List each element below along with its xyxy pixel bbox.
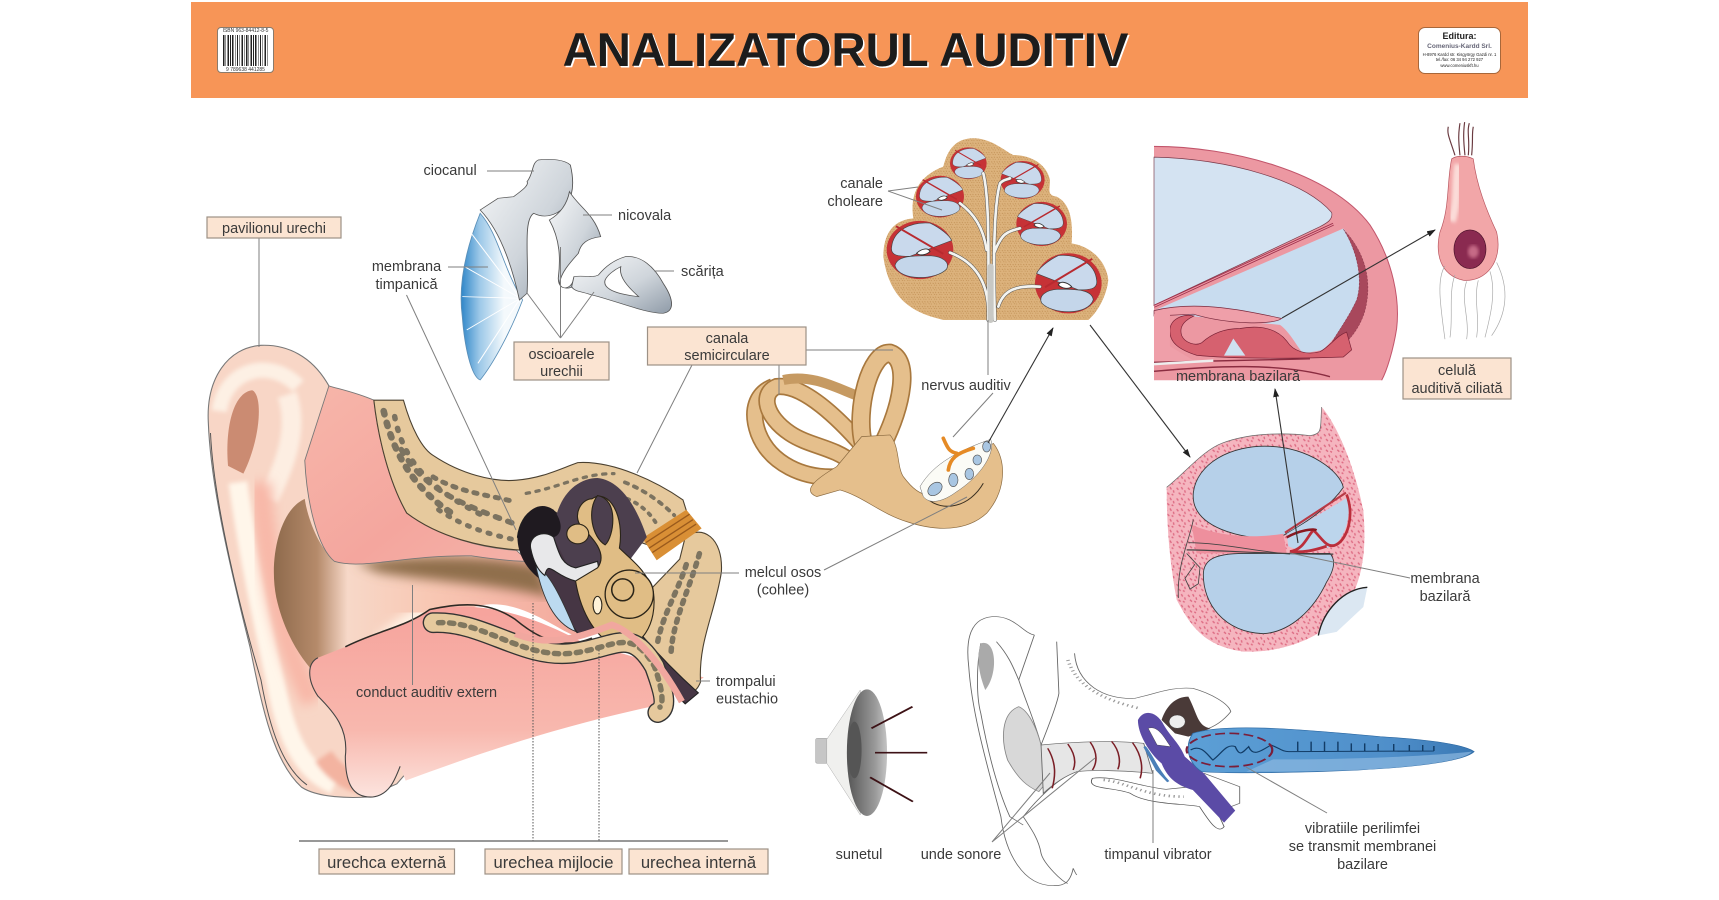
label: canala semicirculare: canala (706, 331, 748, 347)
stapes (572, 256, 672, 313)
hair cell illustration (1438, 122, 1505, 339)
label: canala semicirculare (648, 327, 806, 365)
outer ear pinna (208, 345, 411, 797)
label: timpanul vibrator: timpanul vibrator (1104, 847, 1212, 863)
publisher box: Editura: (1442, 31, 1476, 41)
orange nerve band (642, 510, 702, 560)
label: vibratiile perilimfei: bazilare (1337, 857, 1388, 873)
title: ANALIZATORUL AUDITIV (563, 24, 1128, 77)
label: canala semicirculare: semicirculare (684, 348, 770, 364)
arrows between diagrams (988, 230, 1435, 543)
stria vascularis (1329, 229, 1368, 353)
dark middle ear cavity (517, 508, 698, 704)
label: nicovala: nicovala (618, 208, 672, 224)
label: trompalui eustachio: trompalui (716, 674, 776, 690)
label: membrana timpanica: timpanică (375, 277, 438, 293)
scala media (1154, 229, 1362, 353)
tympanic blue membrane (536, 567, 576, 631)
label: scarita: scărița (681, 264, 725, 280)
labyrinth illustration (755, 353, 1003, 528)
basilar fibres (1191, 742, 1434, 760)
basilar membrane (1154, 359, 1330, 377)
tympanic membrane (461, 213, 523, 380)
basal fibres (1440, 262, 1505, 339)
scala vestibuli (1154, 157, 1332, 305)
label: vibratiile perilimfei: vibratiile perilimfei (1305, 821, 1420, 837)
labyrinth small (576, 496, 654, 647)
conchal pink flap (305, 386, 528, 564)
leader lines (259, 171, 1410, 843)
label: celula auditiva ciliata (1403, 358, 1511, 399)
label: urechea externa: urechca externă (327, 853, 447, 872)
label: sunetul: sunetul (836, 847, 882, 863)
temporal bone upper (374, 400, 688, 550)
opened cochlea turns (920, 439, 992, 501)
publisher box: H-8976 Kardd str. Kisgyörgy Gazdi nr. 1 (1423, 52, 1496, 57)
publisher box: Comenius-Kardd Srl. (1427, 43, 1492, 50)
ossicles illustration (461, 159, 672, 380)
publisher box (1418, 27, 1501, 74)
incus (549, 192, 601, 288)
lower canal bone (1091, 778, 1224, 829)
label: canale choleare: canale (840, 176, 883, 192)
label: oscioarele urechii (514, 342, 609, 380)
tectorial membrane (1154, 306, 1282, 323)
header band (191, 2, 1528, 98)
inner dark cavity (1162, 697, 1211, 737)
scala vestibuli blue (1193, 446, 1343, 539)
label: urechea mijlocie (485, 849, 622, 874)
label: nervus auditiv: nervus auditiv (921, 378, 1011, 394)
label: membrana bazilara on duct: membrana bazilară (1176, 369, 1301, 385)
label: urechea externa (319, 849, 454, 874)
spiral chambers (887, 221, 953, 279)
scala media with red organ (1287, 498, 1349, 551)
outer ear outline (968, 617, 1077, 886)
bottom right arc (1318, 587, 1367, 636)
cilia (1448, 122, 1473, 155)
black crescent (517, 506, 561, 581)
organ of Corti (1170, 315, 1352, 358)
temporal bone outline (1075, 653, 1240, 807)
orange nerve (943, 438, 973, 470)
label: melcul osos: melcul osos (745, 565, 821, 581)
magnified cochlear duct illustration (1154, 146, 1397, 380)
label: celula auditiva ciliata: auditivă ciliată (1411, 381, 1503, 397)
label: membrana bazilara lower: membrana (1410, 571, 1480, 587)
mastoid bone (627, 532, 722, 693)
label: urechea interna: urechea internă (641, 853, 757, 872)
bottom hearing scheme illustration (816, 617, 1474, 886)
label: celula auditiva ciliata: celulă (1438, 363, 1476, 379)
label: trompalui eustachio: eustachio (716, 692, 778, 708)
label: membrana bazilara lower: bazilară (1420, 589, 1471, 605)
nerve branch (1178, 519, 1333, 598)
eustachian tube wall (433, 623, 664, 713)
sound source (816, 689, 927, 816)
Reissner membrane (1154, 224, 1333, 306)
nucleus (1454, 230, 1486, 269)
label: unde sonore: unde sonore (921, 847, 1001, 863)
pink bone wall (1167, 407, 1364, 652)
publisher box: tel./fax: 06 34 94 272 927 (1436, 57, 1483, 62)
ossicles small (530, 534, 601, 581)
malleus (480, 159, 573, 300)
lower ear flesh (310, 607, 704, 797)
scala tympani blue (1203, 553, 1334, 634)
ear canal (274, 499, 581, 707)
pink wall (1154, 146, 1397, 380)
semicircular canal rings (755, 353, 902, 477)
vestibule and cochlea body (810, 435, 1003, 528)
barcode: ISBN 963-84412-8-5 9 789638 441285 (223, 28, 268, 73)
label: membrana timpanica: membrana (372, 259, 441, 275)
large ear cross-section (208, 345, 722, 797)
label: pavilionul urechi (207, 217, 341, 238)
label: canale choleare: choleare (827, 194, 883, 210)
ear canal with sound waves (1041, 742, 1153, 793)
unrolled cochlea (1188, 728, 1474, 773)
scala section illustration (1167, 407, 1367, 652)
label: urechea mijlocie: urechea mijlocie (494, 853, 613, 872)
label: urechea interna (629, 849, 768, 874)
label: conduct auditiv extern: conduct auditiv extern (356, 685, 497, 701)
sound rays (870, 707, 927, 802)
label: oscioarele urechii: oscioarele (528, 347, 595, 363)
publisher box: www.comeniuskft.hu (1440, 63, 1479, 68)
label: vibratiile perilimfei: se transmit membranei (1289, 839, 1436, 855)
spiral lamina (1192, 525, 1287, 553)
tan bone (883, 138, 1108, 320)
label: ciocanul: ciocanul (424, 163, 477, 179)
auditory nerve trunk (950, 173, 1040, 320)
cell body (1438, 156, 1498, 280)
label: oscioarele urechii: urechii (540, 364, 583, 380)
label: melcul osos: (cohlee) (757, 582, 809, 598)
cochlea cross-section illustration (883, 138, 1108, 320)
middle ear purple (1138, 713, 1235, 823)
dashed ellipse (1187, 733, 1272, 767)
label: pavilionul urechi: pavilionul urechi (222, 221, 326, 237)
